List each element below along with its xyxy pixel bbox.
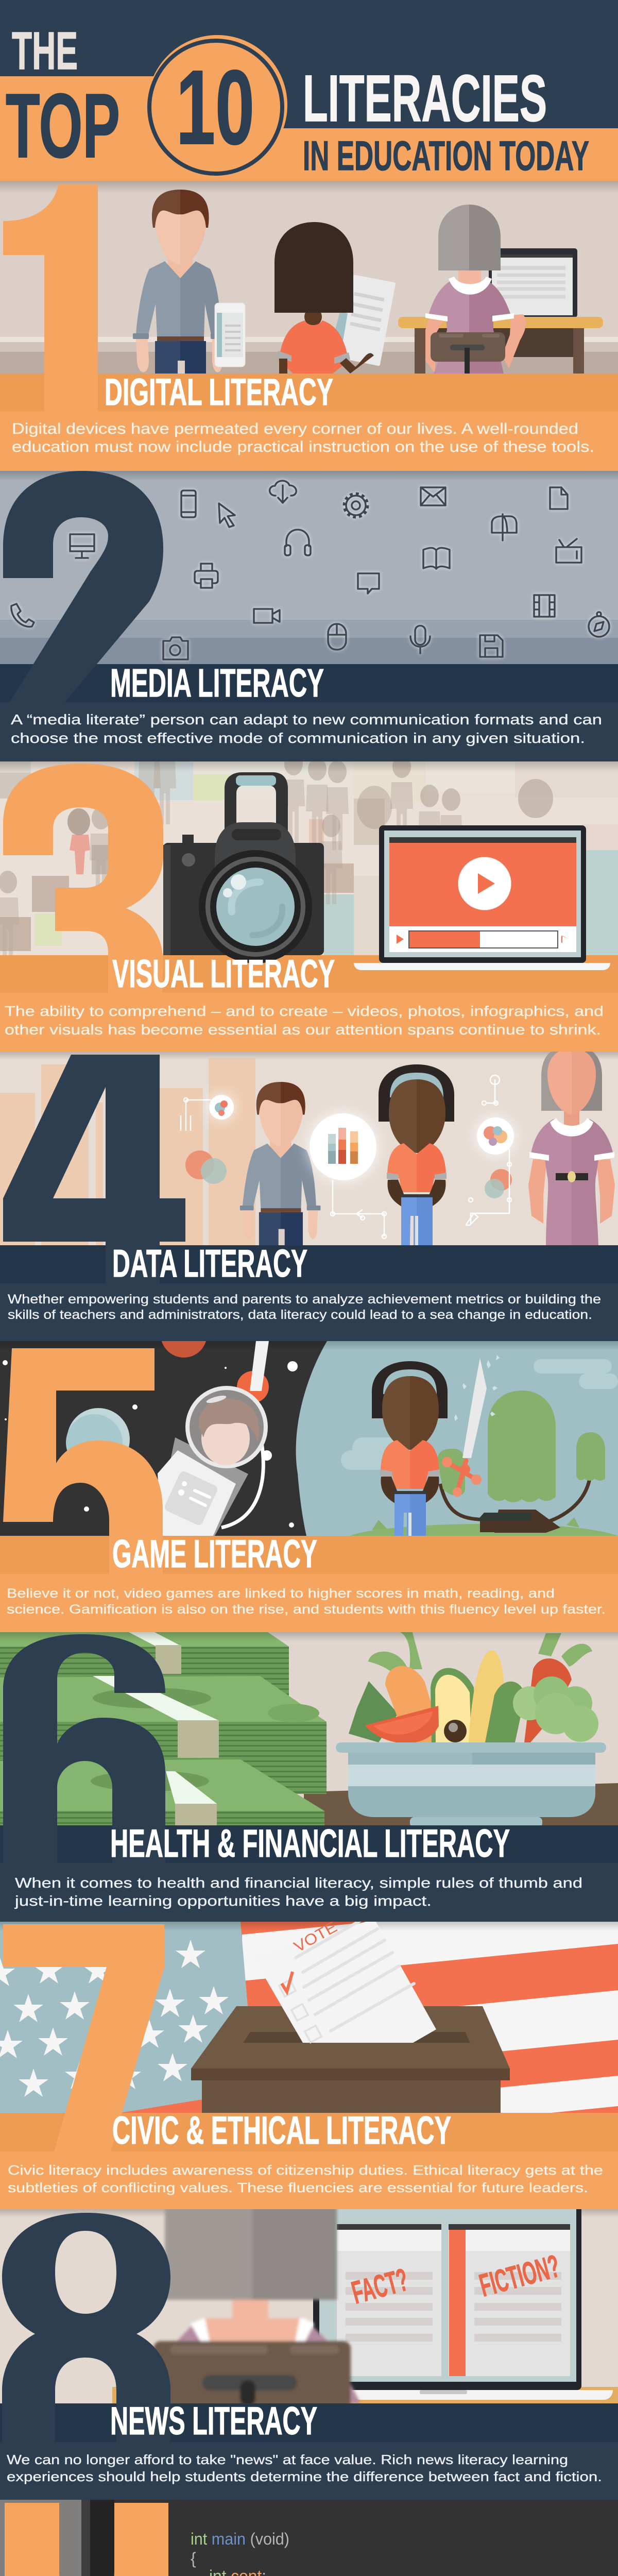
body text: game literacy (7, 1586, 606, 1617)
numeral: 2 (3, 471, 163, 702)
body text: civic and ethical literacy: Civic literacy includes awareness of citizenship duties. Ethical literacy gets at the (8, 2162, 603, 2178)
body text: digital literacy: education must now include practical instruction on the use of these tools. (12, 438, 594, 455)
icon: phone (181, 490, 196, 517)
illustration: laptop with fact and fiction (313, 2200, 613, 2400)
badge: circled 10 (147, 35, 287, 175)
body text: civic and ethical literacy: subtleties of conflicting values. These fluencies are essential for future leaders. (8, 2180, 588, 2195)
label: fact: FACT? (348, 2262, 412, 2311)
icon: camera (163, 637, 188, 659)
icon: smartphone (215, 303, 245, 367)
body text: media literacy (11, 711, 602, 746)
body text: data literacy (8, 1292, 601, 1322)
panel: civic and ethical literacy (0, 1897, 618, 2209)
decorative data bubbles (185, 1150, 512, 1198)
body text: news literacy: experiences should help students determine the difference between fact and fiction. (7, 2469, 602, 2484)
icon: microphone (410, 625, 430, 653)
data bubble: right (477, 1117, 514, 1155)
illustration: ballot paper (252, 1914, 436, 2043)
heading: news literacy: NEWS LITERACY (110, 2399, 317, 2443)
body text: civic and ethical literacy (8, 2162, 603, 2195)
body text: digital literacy: Digital devices have permeated every corner of our lives. A well-rounded (12, 420, 578, 437)
illustration: three people with devices (133, 190, 603, 374)
body text: visual literacy: The ability to comprehend – and to create – videos, photos, infographics, and (5, 1003, 604, 1019)
illustration: camera (163, 772, 324, 963)
data bubble: left (209, 1095, 234, 1120)
panel: game literacy (0, 1311, 618, 1632)
numeral: 1 (3, 184, 98, 411)
code sample (191, 2530, 568, 2576)
space scene: planets and stars (3, 1311, 298, 1528)
body text: media literacy: A “media literate” person can adapt to new communication formats and can (11, 711, 602, 727)
icon: mail (421, 487, 445, 505)
figure: blurred woman (153, 2200, 360, 2411)
title: TOP: TOP (6, 75, 120, 177)
panel: data literacy (0, 1046, 618, 1341)
icon: television (556, 539, 581, 563)
icon: mouse (328, 624, 346, 650)
illustration: salad bowl (336, 1742, 606, 1827)
body text: media literacy: choose the most effective mode of communication in any given situation. (11, 730, 585, 746)
panel: health and financial literacy (0, 1631, 618, 1922)
body text: health and financial literacy: When it comes to health and financial literacy, simple rules of thumb and (15, 1875, 582, 1891)
numeral: 9 (5, 2503, 168, 2576)
panel: digital literacy (0, 181, 618, 471)
illustration: desk with laptop (398, 248, 603, 375)
heading: media literacy: MEDIA LITERACY (110, 661, 324, 705)
illustration: laptop playing video (354, 825, 610, 970)
icon: gear (344, 494, 368, 517)
illustration: vegetables (349, 1631, 598, 1743)
body text: digital literacy (12, 420, 594, 455)
numeral: 3 (3, 764, 163, 993)
label: vote: VOTE (291, 1919, 340, 1956)
icon: sword (442, 1355, 500, 1497)
icon: cursor (219, 503, 235, 527)
body text: news literacy: We can no longer afford to take "news" at face value. Rich news literacy learning (7, 2452, 568, 2467)
icon: headphones (285, 530, 311, 555)
illustration: stacks of money (0, 1632, 327, 1825)
diagram: connector lines (181, 1075, 511, 1239)
icon: cloud download (270, 481, 296, 503)
body text: visual literacy (5, 1003, 604, 1038)
panel: header (0, 0, 618, 181)
figure: man (240, 1082, 320, 1245)
illustration: flag (0, 1897, 618, 2144)
background: clouds (341, 1359, 618, 1470)
numeral: 7 (3, 1924, 164, 2151)
icon set: media icons (11, 481, 609, 659)
body text: data literacy: Whether empowering students and parents to analyze achievement metrics or building the (8, 1292, 601, 1307)
figure: girl with headband (379, 1064, 454, 1267)
icon: open book (423, 548, 450, 569)
code sample: int main (void) (191, 2530, 289, 2548)
figure: man with phone (133, 190, 221, 374)
body text: health and financial literacy: just-in-time learning opportunities have a big impact. (14, 1893, 432, 1909)
icon: video camera (254, 609, 280, 623)
illustration: ballot box (191, 2006, 510, 2113)
body text: game literacy: Believe it or not, video games are linked to higher scores in math, reading, and (7, 1586, 555, 1601)
icon: printer (195, 564, 218, 588)
title: THE: THE (12, 21, 78, 80)
numeral: 4 (3, 1055, 185, 1283)
illustration: trees and ground (350, 1391, 618, 1536)
numeral: 8 (2, 2213, 170, 2442)
icon: telephone handset (11, 604, 34, 627)
icon: tablet (333, 276, 394, 364)
heading: game literacy: GAME LITERACY (112, 1532, 317, 1576)
panel: visual literacy (0, 735, 618, 1052)
background: game world (296, 1341, 618, 1536)
icon: floppy disk (480, 635, 503, 657)
figure: astronaut (154, 1341, 272, 1540)
background: faded collage (0, 761, 618, 955)
panel: news literacy (0, 2200, 618, 2500)
heading: visual literacy: VISUAL LITERACY (112, 952, 335, 996)
body text: news literacy (7, 2452, 602, 2484)
code sample: { (191, 2549, 196, 2568)
figure: woman in purple dress (528, 1046, 615, 1247)
chart bubble: bar chart (310, 1113, 376, 1180)
icon: compass (589, 612, 609, 637)
body text: visual literacy: other visuals has become essential as our attention spans continue to shrink. (5, 1022, 601, 1038)
heading: data literacy: DATA LITERACY (112, 1242, 307, 1285)
numeral: 5 (3, 1348, 163, 1574)
body text: game literacy: science. Gamification is also on the rise, and students with this fluency level up faster. (7, 1602, 606, 1617)
figure: girl seen from behind (274, 222, 374, 377)
icon: speech bubble (358, 573, 379, 594)
badge: circled 10: 10 (176, 48, 254, 166)
background: pale skyline bars (0, 1058, 255, 1245)
body text: data literacy: skills of teachers and administrators, data literacy could lead to a sea change in education. (8, 1308, 592, 1322)
panel: coding and computational literacy (0, 2500, 618, 2576)
icon: document (550, 487, 568, 509)
body text: health and financial literacy (14, 1875, 582, 1909)
heading: digital literacy: DIGITAL LITERACY (105, 371, 333, 413)
numeral: 6 (3, 1634, 165, 1863)
panel: media literacy (0, 471, 618, 761)
icon: film strip (534, 595, 555, 617)
figure: girl with sword (372, 1361, 448, 1564)
icon: mailbox (492, 514, 517, 540)
figure: woman at desk from behind (425, 205, 526, 375)
icon: monitor (70, 534, 94, 558)
